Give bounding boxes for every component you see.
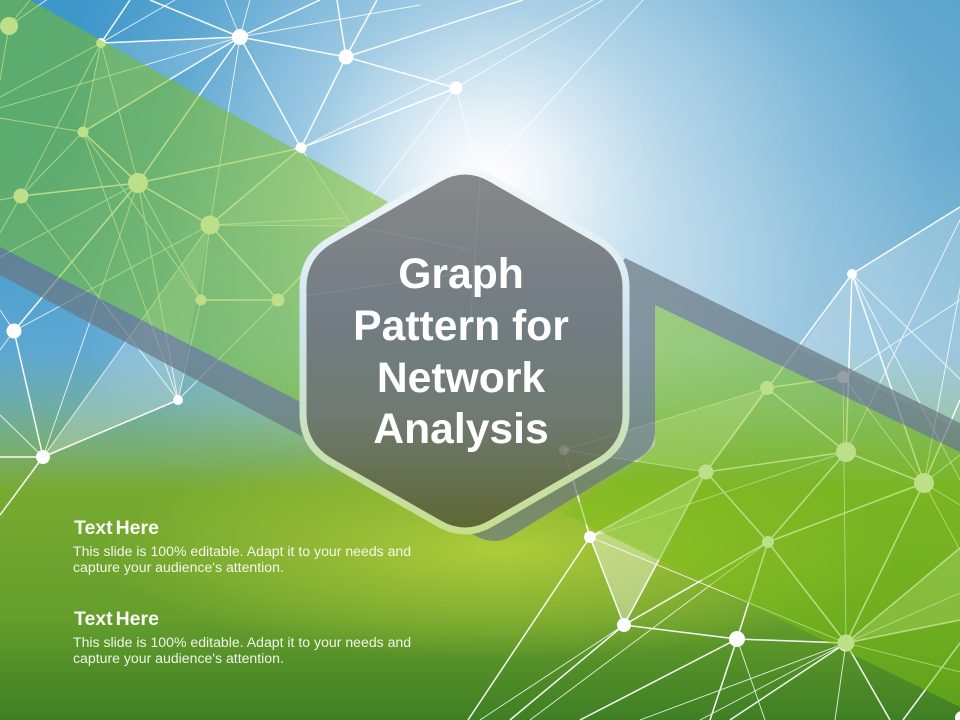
text block 2: capture your audience's attention.: [73, 650, 284, 666]
text block 2: [73, 608, 411, 666]
title: Network: [377, 354, 545, 402]
text block 2: This slide is 100% editable. Adapt it to your needs and: [73, 634, 411, 650]
central hexagon: [300, 170, 630, 534]
title: Pattern for: [353, 302, 569, 350]
green diagonal band: right: [563, 305, 960, 707]
text block 1: capture your audience's attention.: [73, 559, 284, 575]
grey diagonal stripe: left: [0, 247, 320, 446]
text block 1: Text Here: [74, 517, 159, 539]
title: [353, 250, 569, 453]
text block 1: [73, 517, 411, 575]
hexagon shadow and grey diagonal stripe: right: [460, 258, 960, 541]
network: bottom-right cluster: [468, 207, 960, 720]
text block 2: Text Here: [74, 608, 159, 630]
title: Graph: [398, 250, 524, 298]
text block 1: This slide is 100% editable. Adapt it to your needs and: [73, 543, 411, 559]
network: top-left cluster: [0, 0, 643, 515]
title: Analysis: [373, 405, 549, 453]
green diagonal band: left: [0, 0, 388, 412]
